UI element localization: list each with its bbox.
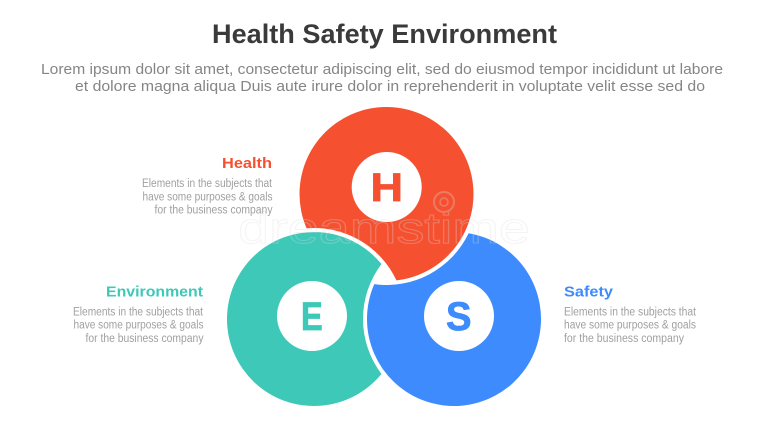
badge: S [424,281,494,351]
label: health [142,155,273,216]
subtitle text [41,61,723,95]
badge: H [352,152,422,222]
label: health: Elements in the subjects that [142,178,273,190]
segment: environment [227,232,381,406]
label: health: for the business company [154,204,273,216]
segment: safety [367,233,541,406]
label: safety: Safety [564,284,614,300]
label: health: Health [222,155,272,172]
venn diagram [227,107,541,406]
label: environment: Environment [106,284,203,300]
label: safety: for the business company [564,333,684,345]
label: environment: have some purposes & goals [74,320,204,332]
watermark: dreamstime [238,204,530,253]
label: environment: for the business company [86,333,204,345]
label: environment: Elements in the subjects that [73,306,204,318]
segment: health [300,107,474,280]
label: environment [73,284,204,345]
label: health: have some purposes & goals [142,192,273,204]
label: safety [564,284,697,345]
badge: S: S [446,295,472,339]
badge: E [277,281,347,351]
subtitle text: Lorem ipsum dolor sit amet, consectetur adipiscing elit, sed do eiusmod tempor incididunt ut labore [41,61,723,78]
label: safety: Elements in the subjects that [564,306,697,318]
watermark [238,192,530,253]
subtitle text: et dolore magna aliqua Duis aute irure dolor in reprehenderit in voluptate velit esse sed do [75,78,705,95]
badge: E: E [301,295,323,339]
label: safety: have some purposes & goals [564,320,696,332]
title: Health Safety Environment [212,19,557,49]
badge: H: H [370,166,403,210]
